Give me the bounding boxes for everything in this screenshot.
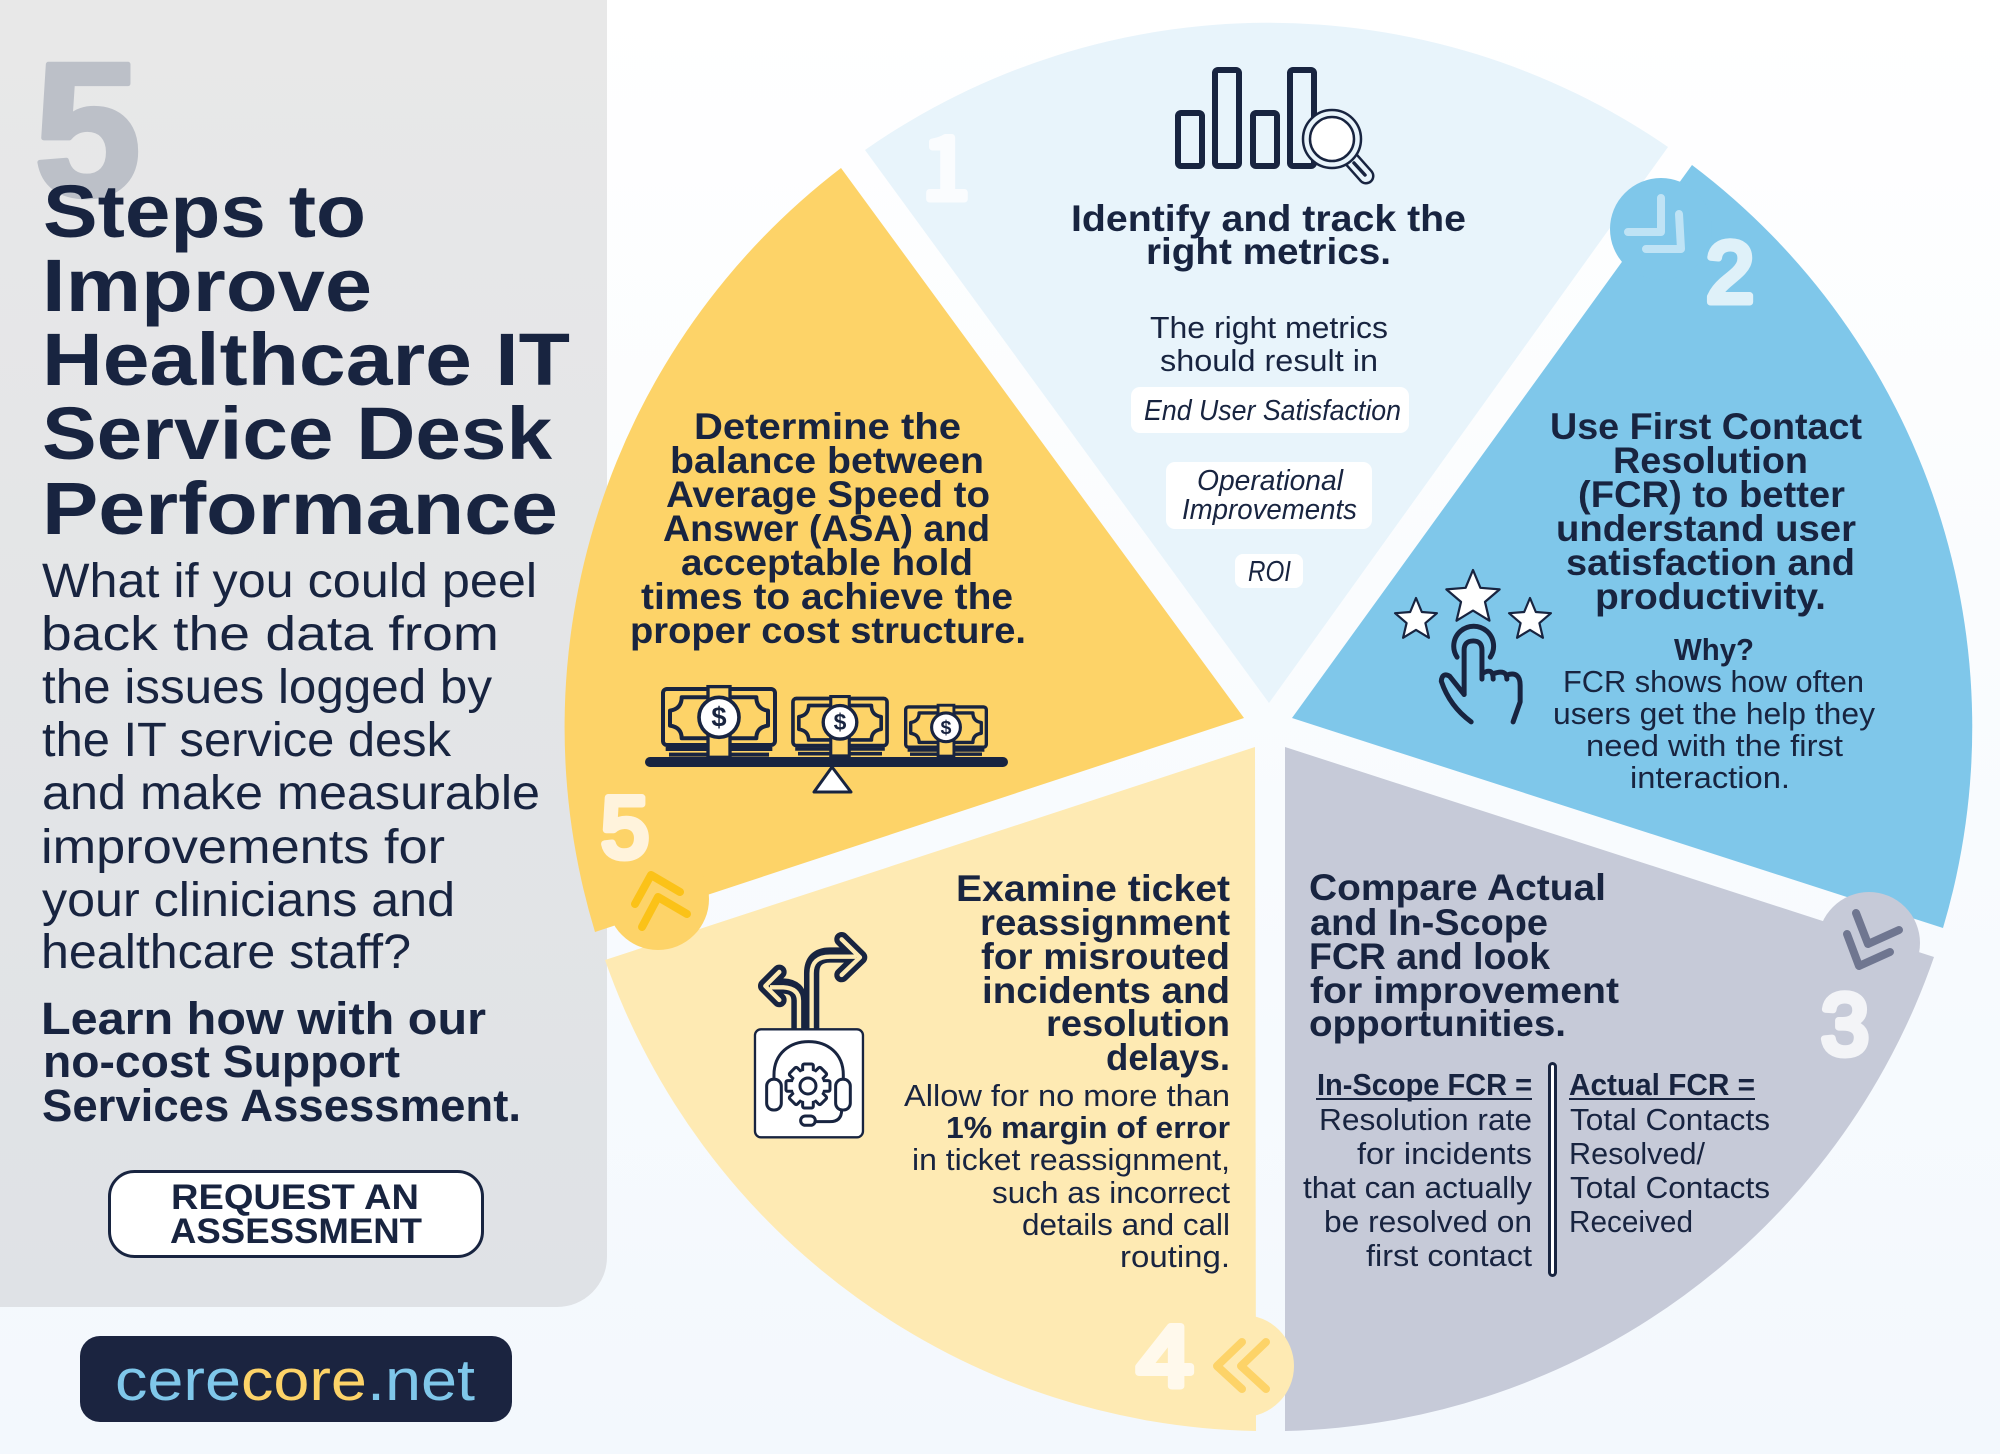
call to action text [41,993,521,1131]
title: Steps to [43,170,366,253]
text: right metrics intro [1150,310,1388,378]
intro paragraph: What if you could peel [42,555,537,608]
heading: step 2: (FCR) to better [1578,474,1845,515]
panel: step 4 segment [605,747,1294,1431]
divider bar [1550,1064,1556,1276]
intro paragraph: healthcare staff? [41,926,411,979]
icon: money stacks on balance: $ [711,702,727,733]
icon: money stacks on balance: $ [834,709,847,735]
text: actual FCR definition: Resolved/ [1569,1136,1705,1171]
text: in-scope FCR definition: In-Scope FCR = [1317,1067,1532,1102]
title: Service Desk [42,392,553,475]
arrow: step 2 chevrons [1628,198,1681,249]
heading: step 5: proper cost structure. [630,610,1026,651]
text: actual FCR definition [1569,1067,1770,1239]
heading: step 5: acceptable hold [681,542,973,583]
pill: operational improvements: Operational [1197,465,1345,497]
heading: step 5: Determine the [694,406,961,447]
intro paragraph [41,555,540,979]
text: margin of error: Allow for no more than [904,1078,1230,1113]
call to action text: Learn how with our [41,993,486,1044]
heading: step 5: balance between [670,440,984,481]
heading: step 4: for misrouted [981,936,1230,977]
text: in-scope FCR definition: that can actually [1303,1170,1533,1205]
button: request an assessment: ASSESSMENT [170,1212,422,1251]
icon: ticket routing arrows and headset [755,939,863,1137]
pill: end user satisfaction [1131,387,1409,433]
text: actual FCR definition: Actual FCR = [1569,1067,1755,1102]
heading: step 3: and In-Scope [1310,902,1548,943]
heading: step 5: Answer (ASA) and [663,508,990,549]
arrow: step 4 chevrons [1217,1342,1266,1389]
text: in-scope FCR definition: be resolved on [1324,1204,1532,1239]
heading: step 2 [1550,406,1862,617]
panel: step 1 segment [865,23,1668,703]
panel: step 2 segment [1292,165,1972,928]
heading: step 4: Examine ticket [956,868,1230,909]
title: Performance [42,467,558,550]
button: request an assessment [110,1172,482,1256]
number 5: 5 [601,780,649,876]
heading: step 3: Compare Actual [1309,867,1606,908]
text: why FCR: FCR shows how often [1563,664,1864,699]
heading: step 2: understand user [1556,508,1856,549]
text: in-scope FCR definition: for incidents [1357,1136,1532,1171]
intro paragraph: improvements for [41,821,445,874]
heading: step 4: delays. [1106,1037,1230,1078]
text: actual FCR definition: Received [1569,1204,1693,1239]
heading: step 5: Average Speed to [666,474,990,515]
title: Healthcare IT [42,318,570,401]
heading: step 2: Use First Contact [1550,406,1862,447]
text: right metrics intro: The right metrics [1150,310,1388,345]
text: margin of error [904,1078,1230,1274]
title [42,170,570,550]
heading: step 1: Identify and track the [1071,198,1466,239]
icon: money stacks on balance: $ [941,717,952,739]
number 4: 4 [1137,1309,1193,1405]
heading: step 4 [956,868,1230,1078]
text: why FCR: Why? [1674,632,1754,667]
pill: operational improvements [1166,462,1372,529]
heading: step 4: reassignment [980,902,1230,943]
heading: step 3 [1309,867,1619,1044]
intro paragraph: the issues logged by [42,661,492,714]
pill: ROI: ROI [1248,556,1291,588]
text: why FCR: interaction. [1630,760,1790,795]
icon: stars and pointing hand [1395,570,1551,722]
text: in-scope FCR definition: Resolution rate [1319,1102,1532,1137]
logo: cerecore.net [80,1336,512,1422]
heading: step 5 [630,406,1026,651]
intro paragraph: and make measurable [42,767,540,820]
number 1: 1 [922,99,970,224]
logo: cerecore.net: cerecore.net [115,1348,475,1413]
call to action text: Services Assessment. [42,1080,521,1131]
call to action text: no-cost Support [43,1036,400,1087]
panel: step 3 segment [1285,747,1934,1431]
text: why FCR: need with the first [1586,728,1843,763]
text: why FCR: users get the help they [1553,696,1876,731]
icon: bar chart with magnifier [1178,70,1366,176]
text: margin of error: 1% margin of error [946,1110,1230,1145]
pill: operational improvements: Improvements [1182,494,1357,526]
text: right metrics intro: should result in [1160,343,1378,378]
panel: step 5 segment [565,168,1244,950]
text: actual FCR definition: Total Contacts [1570,1102,1770,1137]
text: margin of error: routing. [1120,1239,1230,1274]
heading: step 5: times to achieve the [641,576,1013,617]
panel: intro sidebar [0,0,607,1307]
text: in-scope FCR definition [1303,1067,1533,1273]
heading: step 2: Resolution [1613,440,1808,481]
number 3: 3 [1821,977,1869,1073]
heading: step 4: resolution [1046,1003,1230,1044]
intro paragraph: your clinicians and [42,874,455,927]
text: actual FCR definition: Total Contacts [1570,1170,1770,1205]
text: margin of error: such as incorrect [992,1175,1230,1210]
heading: step 2: satisfaction and [1566,542,1855,583]
pill: end user satisfaction: End User Satisfaction [1144,395,1401,427]
number 2: 2 [1706,225,1754,321]
heading: step 1 [1071,198,1466,272]
text: margin of error: details and call [1022,1207,1230,1242]
icon: money stacks on balance [645,687,1008,792]
heading: step 4: incidents and [982,970,1230,1011]
text: margin of error: in ticket reassignment, [912,1142,1230,1177]
big number 5: 5 [34,24,141,236]
text: in-scope FCR definition: first contact [1366,1238,1532,1273]
heading: step 3: opportunities. [1309,1003,1566,1044]
heading: step 3: FCR and look [1309,936,1550,977]
heading: step 2: productivity. [1595,576,1826,617]
arrow: step 5 chevrons [635,875,687,927]
heading: step 1: right metrics. [1146,231,1391,272]
arrow: step 3 chevrons [1847,913,1899,966]
button: request an assessment: REQUEST AN [171,1178,419,1217]
text: why FCR [1553,632,1876,795]
intro paragraph: back the data from [41,608,499,661]
heading: step 3: for improvement [1310,970,1619,1011]
intro paragraph: the IT service desk [42,714,452,767]
title: Improve [42,244,372,327]
